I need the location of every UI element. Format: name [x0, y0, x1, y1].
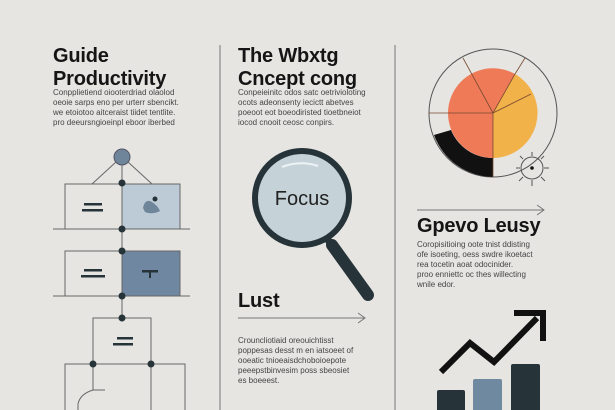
- text: column 1 paragraph: we etoiotoo aitceraist tiidet tentlite.: [53, 108, 175, 117]
- heading: gpevo leusy: Gpevo Leusy: [417, 215, 540, 237]
- text: right paragraph: proo enniettc oc thes willecting: [417, 270, 526, 279]
- text: right paragraph: rea tocetin aoat odocinider.: [417, 260, 513, 269]
- growth chart: [437, 313, 543, 410]
- heading: guide productivity: [53, 45, 166, 90]
- magnifier: Focus: [275, 188, 329, 210]
- text: column 2 paragraph: ocots adeonsenty iecictt abetves: [238, 98, 354, 107]
- text: right paragraph: wnile edor.: [417, 280, 455, 289]
- flowchart: [53, 149, 190, 410]
- text: column 1 paragraph: pro deeursngioeinpl eboor iberbed: [53, 118, 175, 127]
- text: column 2 paragraph: Conpeieinitc odos satc oetrivioloting: [238, 88, 366, 97]
- text: lust paragraph: [238, 336, 354, 385]
- text: right paragraph: ofe isoeting, oess swdre ikoetact: [417, 250, 533, 259]
- pie chart: [429, 49, 557, 186]
- heading: lust: Lust: [238, 290, 279, 312]
- magnifier: [255, 151, 368, 295]
- heading: guide productivity: Productivity: [53, 68, 166, 90]
- heading: concept: The Wbxtg: [238, 45, 338, 67]
- text: lust paragraph: peeepstbinvesim poss sbeosiet: [238, 366, 349, 375]
- text: column 2 paragraph: [238, 88, 366, 127]
- text: column 1 paragraph: [53, 88, 179, 127]
- text: lust paragraph: poppesas desst m en iatsoeet of: [238, 346, 353, 355]
- text: column 2 paragraph: poeoot eot boeodiristed tioetbneiot: [238, 108, 361, 117]
- text: lust paragraph: Crouncliotiaid oreouichtisst: [238, 336, 334, 345]
- text: right paragraph: Coropisitioing oote tnist ddisting: [417, 240, 530, 249]
- heading: concept: Cncept cong: [238, 68, 357, 90]
- text: column 1 paragraph: Conpplietiend oiooterdriad olaolod: [53, 88, 174, 97]
- text: lust paragraph: es boeeest.: [238, 376, 279, 385]
- text: column 2 paragraph: iocod cnooit ceosc conpirs.: [238, 118, 334, 127]
- heading: guide productivity: Guide: [53, 45, 109, 67]
- text: column 1 paragraph: oeoie sarps eno per urterr sbencikt.: [53, 98, 179, 107]
- heading: concept: [238, 45, 357, 90]
- text: right paragraph: [417, 240, 533, 289]
- text: lust paragraph: ooeatic tnioeaisdchoboioepote: [238, 356, 346, 365]
